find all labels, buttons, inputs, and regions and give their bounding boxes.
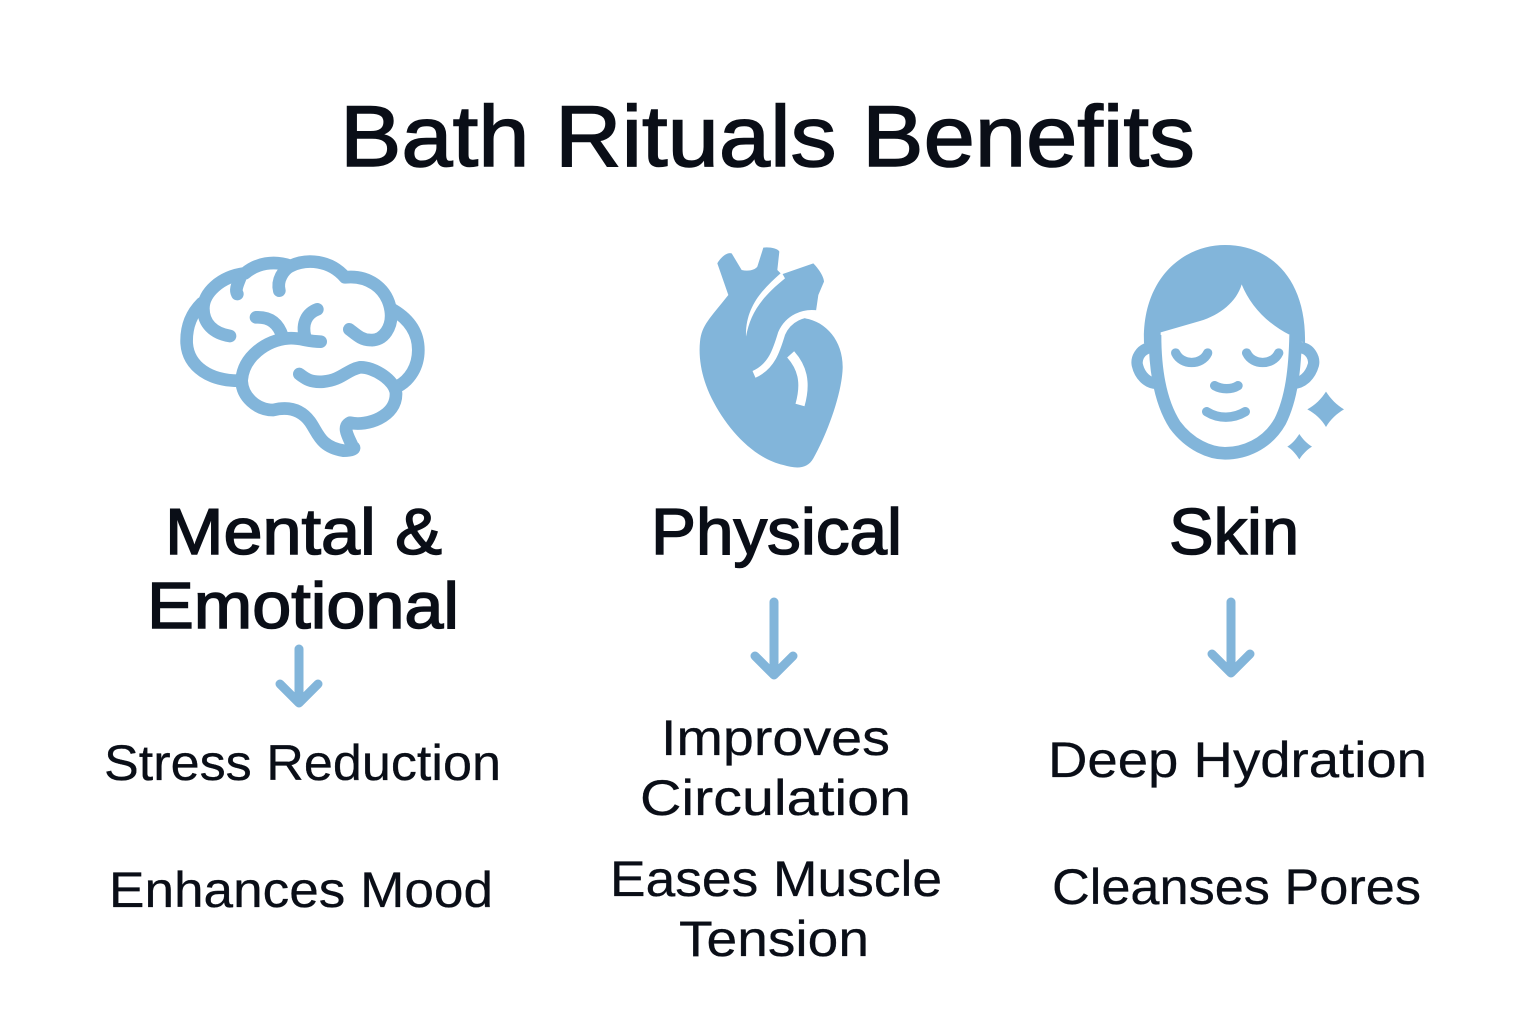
panel: skin bbox=[1048, 245, 1427, 915]
benefit: enhances mood: Enhances Mood bbox=[109, 862, 493, 918]
heading: mental and emotional bbox=[147, 495, 459, 642]
benefit: eases muscle tension bbox=[610, 851, 942, 967]
benefit: improves circulation: Improves bbox=[661, 710, 890, 766]
icon: face with sparkles bbox=[1137, 245, 1344, 459]
arrow: mental bbox=[280, 649, 318, 703]
arrow: physical bbox=[755, 602, 793, 675]
benefit: eases muscle tension: Eases Muscle bbox=[610, 851, 942, 907]
heading: mental and emotional: Emotional bbox=[147, 569, 459, 642]
benefit: improves circulation bbox=[640, 710, 911, 826]
panel: physical bbox=[610, 247, 942, 967]
benefit: cleanses pores: Cleanses Pores bbox=[1052, 859, 1421, 915]
benefit: deep hydration: Deep Hydration bbox=[1048, 732, 1427, 788]
arrow: skin bbox=[1212, 602, 1250, 673]
icon: heart bbox=[700, 247, 843, 467]
title: Bath Rituals Benefits bbox=[340, 89, 1195, 185]
icon: brain bbox=[187, 262, 418, 451]
benefit: stress reduction: Stress Reduction bbox=[104, 735, 501, 791]
heading: mental and emotional: Mental & bbox=[165, 495, 442, 568]
panel: mental and emotional bbox=[104, 262, 501, 918]
heading: physical: Physical bbox=[651, 495, 902, 568]
benefit: eases muscle tension: Tension bbox=[679, 911, 869, 967]
heading: skin: Skin bbox=[1169, 495, 1299, 568]
benefit: improves circulation: Circulation bbox=[640, 770, 911, 826]
